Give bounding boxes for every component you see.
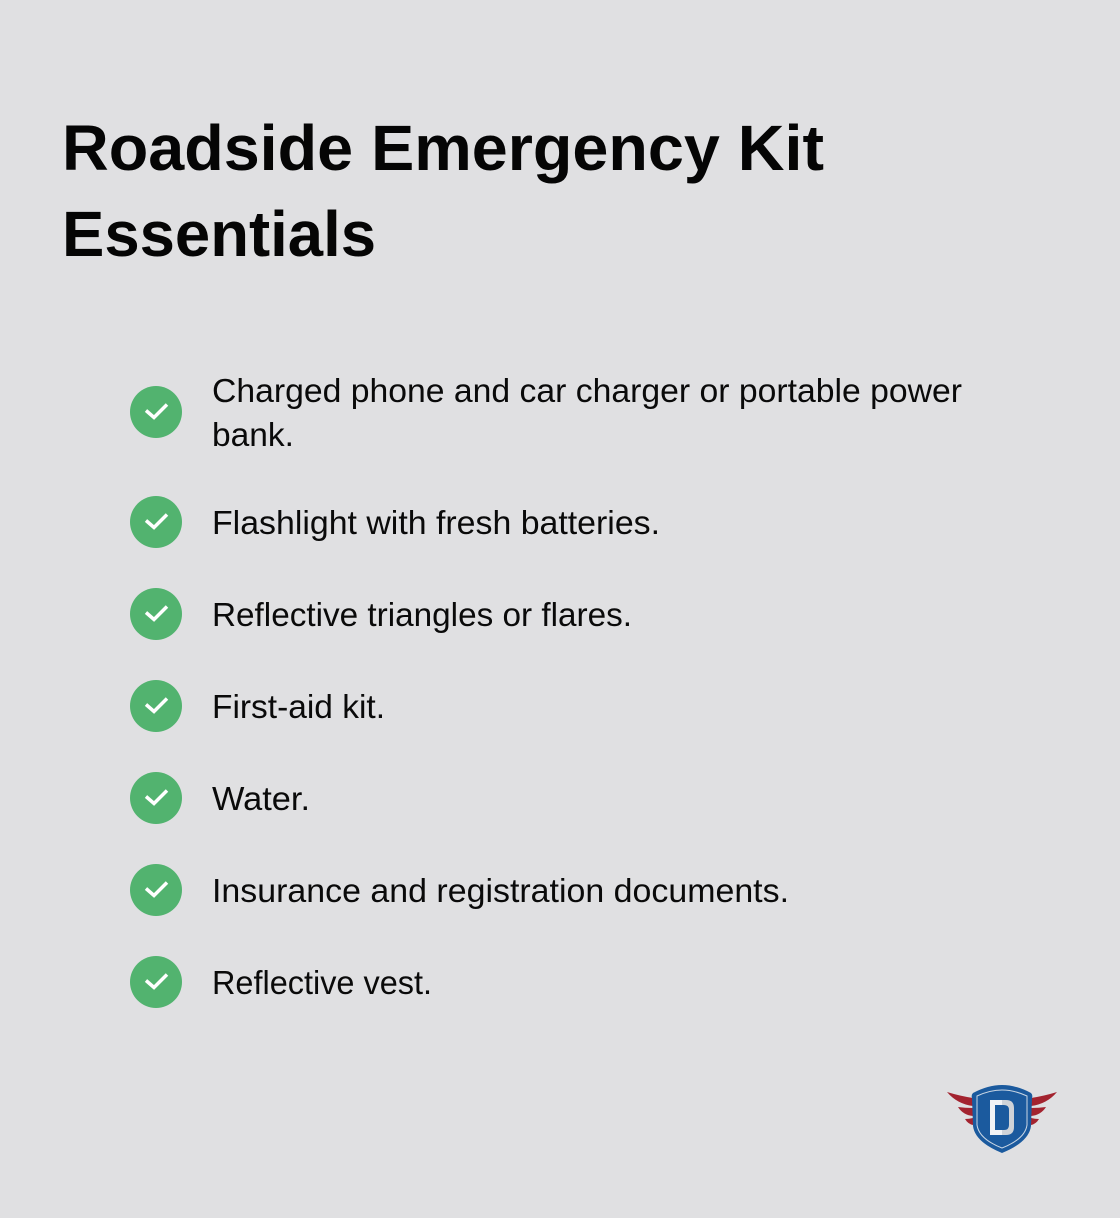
title (62, 112, 824, 270)
item: water (130, 772, 310, 824)
title: Roadside Emergency Kit (62, 112, 824, 184)
item: reflective vest (130, 956, 432, 1008)
item: water: Water. (212, 780, 310, 817)
checklist (130, 372, 962, 1008)
item: reflective triangles (130, 588, 632, 640)
item: flashlight (130, 496, 660, 548)
item: insurance documents: Insurance and registration documents. (212, 872, 789, 909)
item: first-aid kit: First-aid kit. (212, 688, 385, 725)
item: insurance documents (130, 864, 789, 916)
item: phone and charger: bank. (212, 416, 294, 453)
item: phone and charger (130, 372, 962, 453)
title: Essentials (62, 198, 376, 270)
item: reflective vest: Reflective vest. (212, 964, 432, 1001)
icon: winged shield logo (947, 1085, 1057, 1153)
item: flashlight: Flashlight with fresh batteries. (212, 504, 660, 541)
item: reflective triangles: Reflective triangles or flares. (212, 596, 632, 633)
item: phone and charger: Charged phone and car charger or portable power (212, 372, 962, 409)
item: first-aid kit (130, 680, 385, 732)
